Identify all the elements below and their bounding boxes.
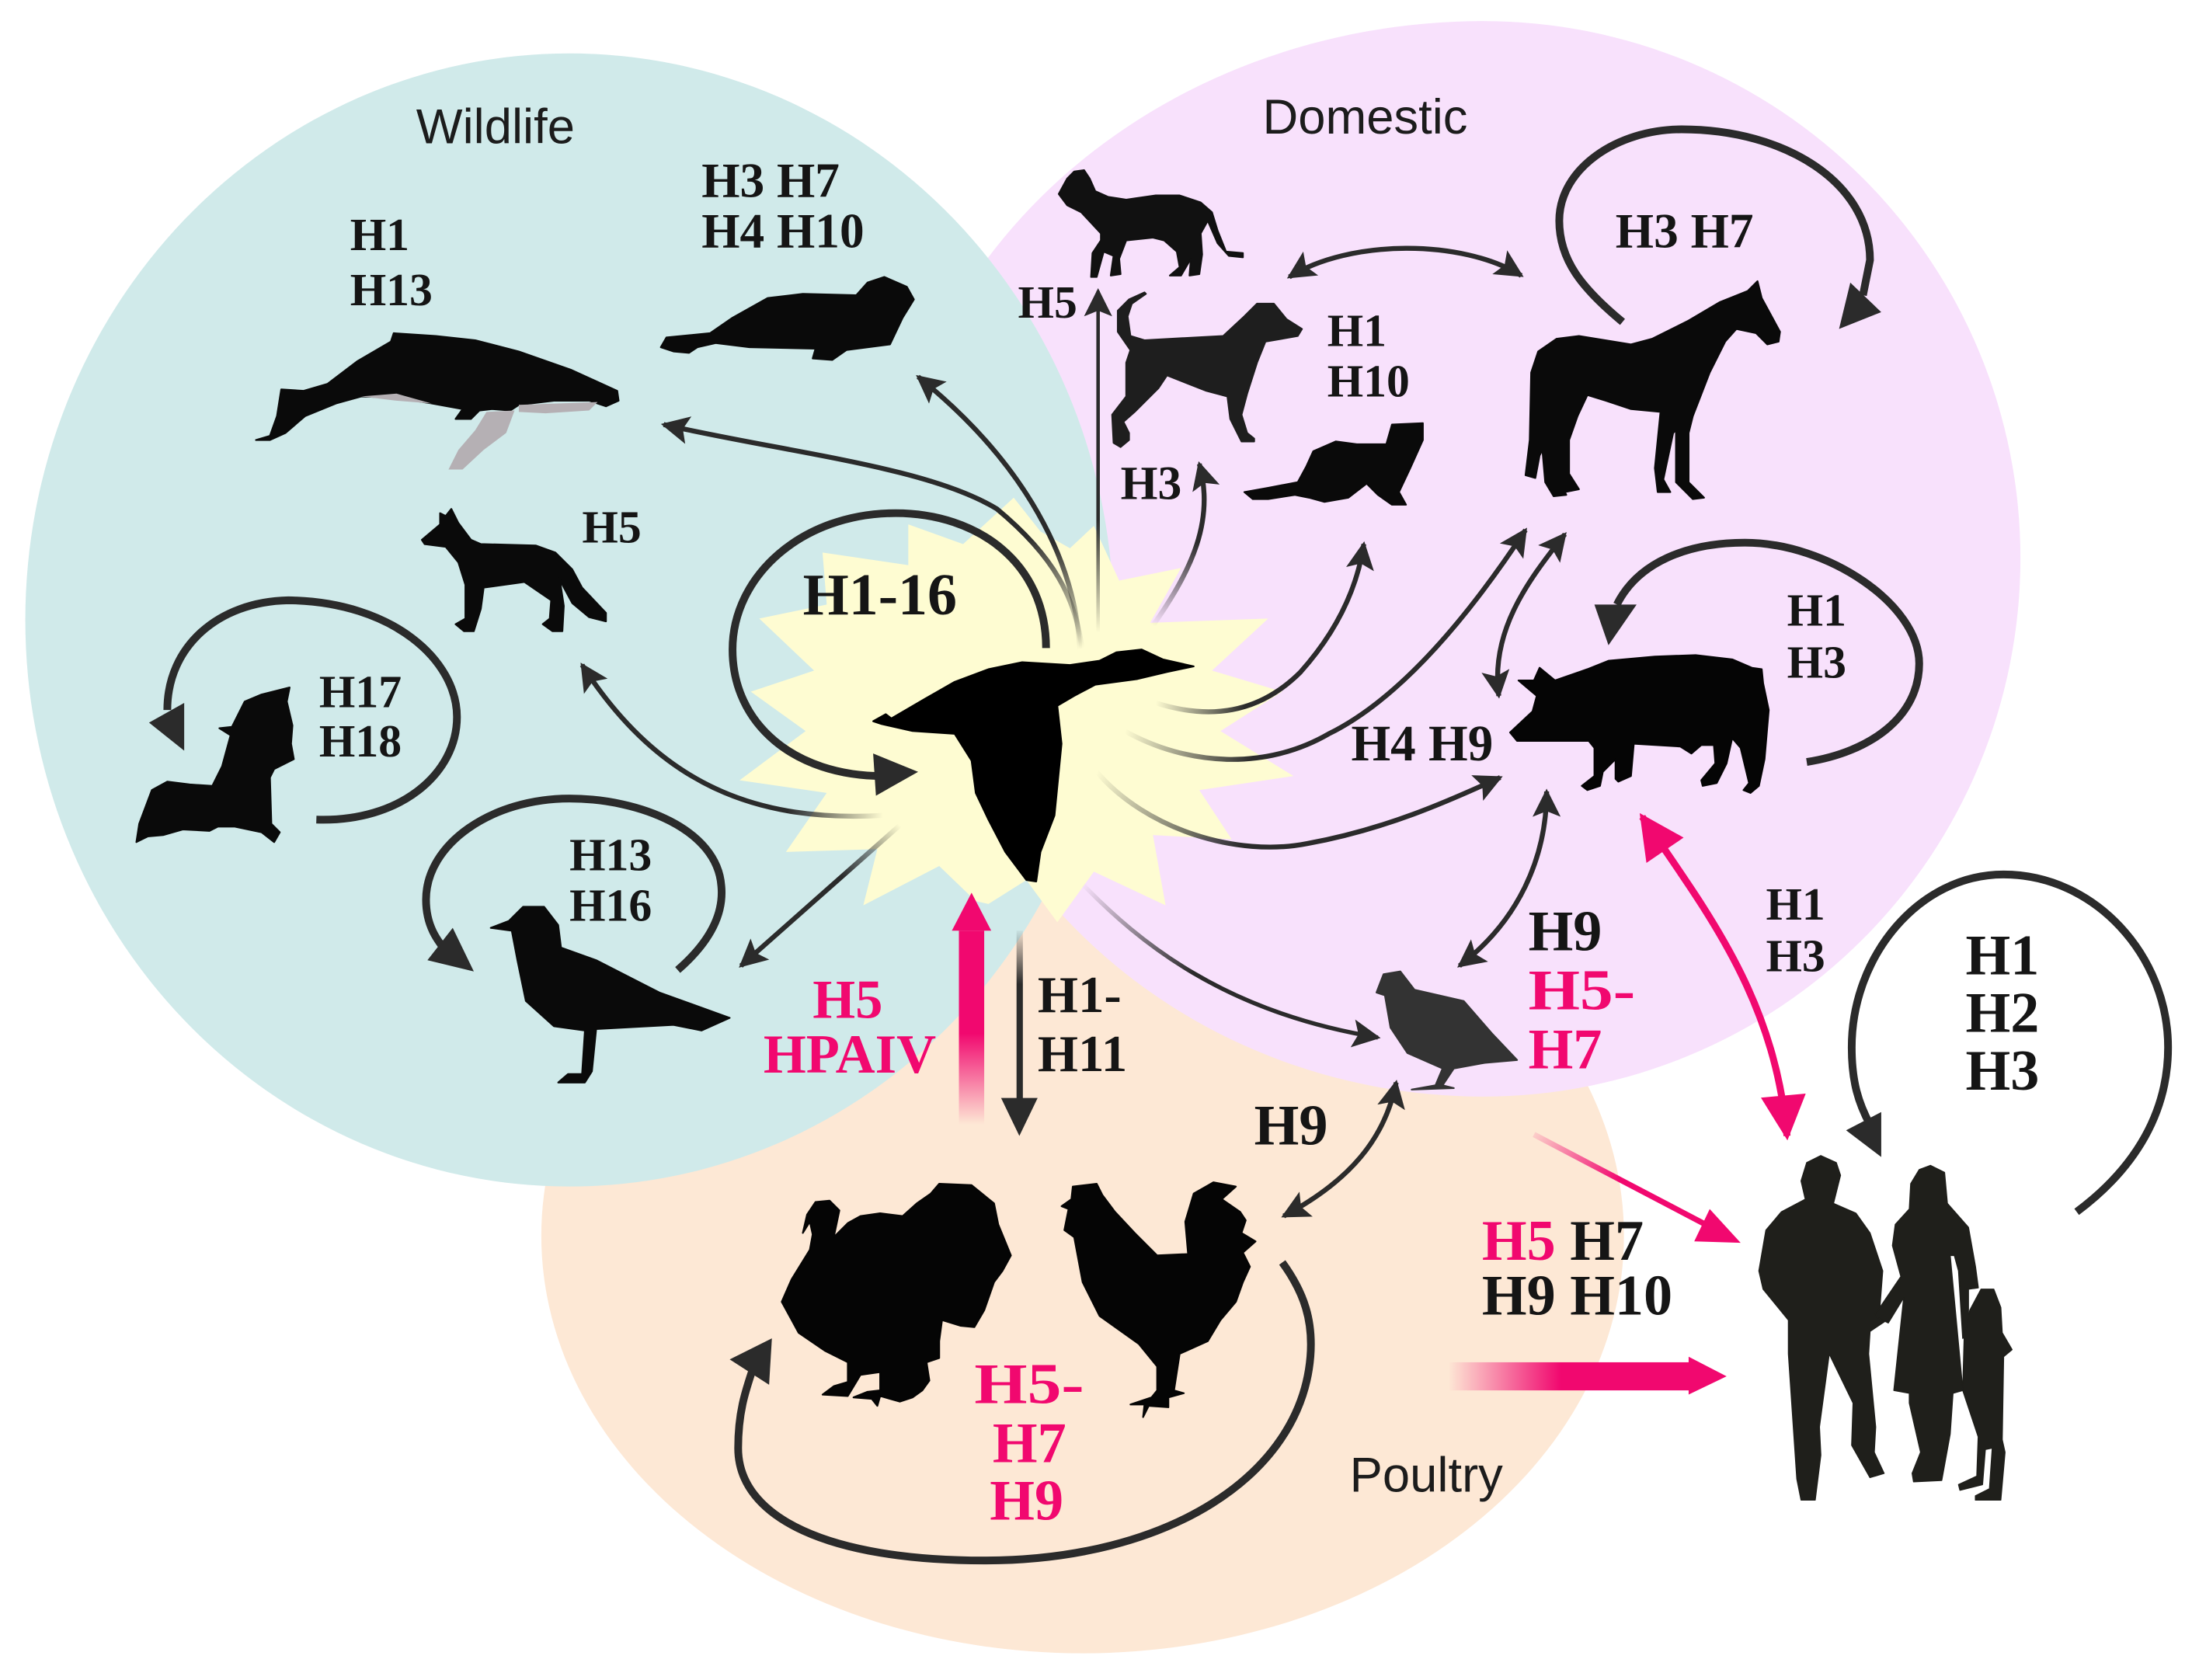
label: human subtypes: H2: [1966, 982, 2039, 1045]
arrow: human self loop: [1846, 875, 2168, 1212]
arrow: wild bird to quail: [1083, 885, 1378, 1038]
panel: domestic circle: [886, 21, 2020, 1097]
label: pig subtypes: H3: [1787, 636, 1846, 687]
icon: fox: [422, 509, 606, 631]
icon: flying wild duck: [873, 649, 1194, 882]
icon: bat: [137, 687, 294, 842]
label: gull subtypes: H16: [569, 880, 652, 931]
arrow: quail to human: [1534, 1135, 1741, 1243]
label: quail subtypes: H9: [1529, 900, 1602, 964]
arrow: wild bird to poultry: [1001, 930, 1038, 1136]
label: dog subtypes: H1: [1327, 304, 1387, 356]
label: whale subtypes: [350, 209, 433, 315]
arrow: wild bird to ferret: [1156, 544, 1364, 711]
label: quail to poultry subtype: H9: [1254, 1094, 1327, 1157]
label: wild bird subtypes: H1-16: [803, 562, 957, 628]
label: bat subtypes: H17: [319, 666, 402, 717]
label: quail subtypes: H5-: [1529, 959, 1635, 1023]
arrow: wild bird self loop: [732, 513, 1046, 795]
arrow: wild bird to horse: [1125, 530, 1526, 760]
label: poultry to human subtypes: [1482, 1209, 1672, 1327]
heading: domestic: Domestic: [1262, 90, 1467, 144]
icon: turkey: [781, 1184, 1011, 1406]
label: quail subtypes: [1529, 900, 1635, 1082]
icon: pig: [1510, 655, 1769, 793]
icon: rooster: [1062, 1182, 1255, 1417]
label: poultry from wild bird: H11: [1038, 1025, 1127, 1083]
icon: ferret: [1244, 423, 1423, 505]
label: HPAIV: HPAIV: [764, 1024, 936, 1085]
arrow: poultry to wild bird (HPAIV): [952, 892, 991, 1125]
label: dog subtypes: H10: [1327, 355, 1410, 406]
label: whale subtypes: H13: [350, 264, 433, 315]
arrow: pig to human: [1642, 817, 1787, 1136]
arrow: wild bird to cat: [1097, 291, 1099, 633]
label: pig to human subtypes: H1: [1766, 878, 1825, 930]
label: poultry subtypes: H9: [990, 1470, 1063, 1533]
panel: wildlife circle: [26, 54, 1114, 1187]
icon: human family: [1759, 1156, 2012, 1500]
label: fox subtype: H5: [582, 502, 642, 553]
label: dog subtypes: [1327, 304, 1410, 406]
label: bat subtypes: H18: [319, 715, 402, 767]
label: human subtypes: H1: [1966, 923, 2039, 987]
label: human subtypes: H3: [1966, 1039, 2039, 1103]
label: bat subtypes: [319, 666, 402, 767]
arrow: wild bird to gull: [741, 825, 899, 965]
arrow: gull self loop: [426, 798, 722, 972]
label: quail subtypes: H7: [1529, 1018, 1602, 1082]
label: pig subtypes: H1: [1787, 584, 1846, 635]
icon: gull: [491, 906, 729, 1083]
label: poultry to human subtypes: H5 H7: [1482, 1209, 1644, 1273]
label: seal subtypes: H3 H7: [701, 153, 840, 207]
label: gull subtypes: H13: [569, 829, 652, 880]
icon: dog: [1112, 292, 1302, 447]
label: poultry to human subtypes: H9 H10: [1482, 1264, 1672, 1327]
arrow: poultry self loop: [729, 1262, 1311, 1560]
icon: horse: [1526, 281, 1780, 499]
label: poultry subtypes: H7: [993, 1411, 1066, 1475]
arrow: quail to rooster: [1284, 1083, 1396, 1216]
arrow: cat and dog to horse: [1289, 249, 1522, 277]
label: pig incoming subtypes: H4 H9: [1352, 716, 1493, 772]
label: HPAIV: H5: [812, 969, 882, 1030]
label: pig to human subtypes: [1766, 878, 1825, 982]
label: seal subtypes: [701, 153, 865, 259]
label: pig subtypes: [1787, 584, 1846, 687]
label: HPAIV: [764, 969, 936, 1085]
arrow: pig self loop: [1595, 543, 1919, 762]
arrow: wild bird to ferret H3: [1153, 464, 1204, 625]
icon: quail: [1376, 972, 1517, 1090]
label: cat subtype: H5: [1018, 277, 1077, 328]
heading: poultry: Poultry: [1350, 1448, 1503, 1502]
arrow: wild bird to fox: [582, 665, 883, 816]
label: poultry from wild bird: [1038, 966, 1127, 1083]
label: seal subtypes: H4 H10: [701, 204, 865, 259]
label: human subtypes: [1966, 923, 2039, 1103]
arrow: bat self loop: [149, 600, 457, 819]
arrow: wild bird to pig: [1097, 772, 1500, 847]
arrow: wild bird to seal: [918, 377, 1080, 649]
label: poultry subtypes: [974, 1352, 1084, 1533]
label: gull subtypes: [569, 829, 652, 931]
arrow: horse self loop: [1559, 130, 1881, 329]
label: poultry subtypes: H5-: [974, 1352, 1084, 1416]
label: pig to human subtypes: H3: [1766, 930, 1825, 982]
label: whale subtypes: H1: [350, 209, 409, 260]
arrow: pig to quail: [1460, 791, 1547, 965]
icon: humpback whale: [256, 333, 618, 470]
label: ferret H3: H3: [1121, 457, 1181, 510]
arrow: poultry to human: [1449, 1357, 1727, 1395]
icon: cat: [1059, 170, 1243, 277]
arrow: wild bird to whale: [663, 425, 1083, 652]
icon: seal: [661, 277, 914, 360]
heading: wildlife: Wildlife: [416, 100, 575, 155]
label: poultry from wild bird: H1-: [1038, 966, 1122, 1024]
arrow: horse to pig: [1498, 534, 1565, 696]
yellow starburst behind wild bird: [739, 498, 1293, 922]
label: horse subtypes: H3 H7: [1616, 204, 1754, 259]
panel: poultry circle: [541, 818, 1624, 1654]
